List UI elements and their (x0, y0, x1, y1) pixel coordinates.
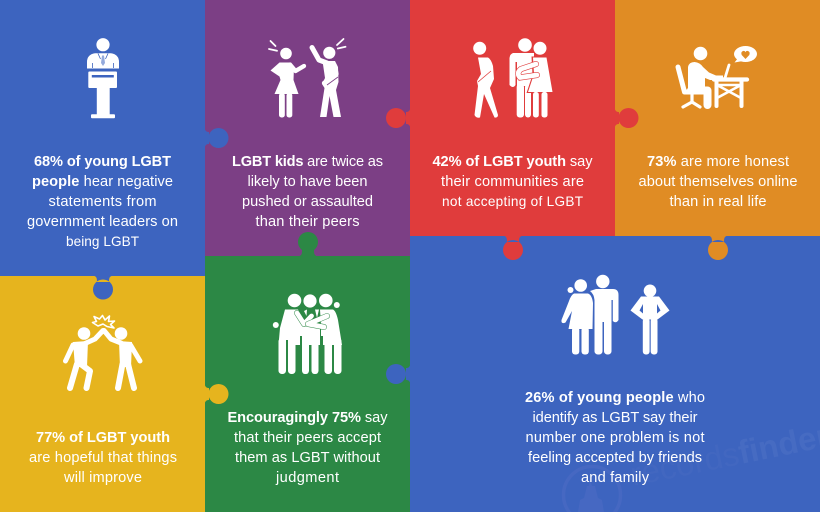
text: government leaders statistic: being LGBT (66, 234, 139, 249)
panel: peers accept (205, 256, 410, 512)
text: pushed or assaulted statistic (232, 154, 383, 230)
puzzle tab: red into orange (615, 108, 638, 128)
text: pushed or assaulted statistic: LGBT kids are twice as (232, 154, 383, 170)
icon: person rejected by couple (473, 38, 554, 118)
puzzle tab: blue into purple (205, 128, 228, 148)
icon: group of three friends hugging (273, 294, 342, 374)
text: friends and family statistic (525, 390, 705, 486)
watermark: recordsfinder logo (564, 416, 820, 512)
panel: pushed or assaulted (205, 0, 410, 256)
text: friends and family statistic: feeling accepted by friends (528, 450, 702, 466)
icon: family and isolated child (561, 275, 670, 354)
puzzle tab: red into purple (386, 108, 410, 128)
panel: hopeful (0, 276, 205, 512)
text: hopeful statistic (29, 430, 177, 486)
text: honest online statistic: than in real life (670, 194, 766, 210)
text: hopeful statistic: will improve (63, 470, 142, 486)
text: hopeful statistic: are hopeful that things (29, 450, 177, 466)
text: government leaders statistic: 68% of young LGBT (34, 154, 171, 170)
text: friends and family statistic: 26% of young people who (525, 390, 705, 406)
puzzle tab: red into blue (503, 236, 523, 260)
text: peers accept statistic (228, 410, 388, 486)
puzzle tab: orange into blue (708, 236, 728, 260)
text: honest online statistic (638, 154, 798, 210)
puzzle tab: green into purple (298, 232, 318, 256)
text: friends and family statistic: number one problem is not (526, 430, 704, 446)
text: government leaders statistic: government leaders on (27, 214, 178, 230)
text: pushed or assaulted statistic: likely to have been (248, 174, 368, 190)
icon: two people high-fiving (66, 316, 140, 388)
text: communities statistic: 42% of LGBT youth say (432, 154, 593, 170)
text: peers accept statistic: Encouragingly 75% say (228, 410, 388, 426)
puzzle tab: yellow into green (205, 384, 228, 404)
text: pushed or assaulted statistic: than their peers (256, 214, 360, 230)
text: peers accept statistic: judgment (275, 470, 339, 486)
text: communities statistic (432, 154, 593, 209)
text: peers accept statistic: them as LGBT without (235, 450, 380, 466)
puzzle tab: blue into green (386, 364, 410, 384)
text: hopeful statistic: 77% of LGBT youth (36, 430, 170, 446)
puzzle tab: blue into yellow (93, 276, 113, 300)
text: friends and family statistic: identify as LGBT say their (532, 410, 698, 426)
icon: speaker at podium (87, 38, 119, 118)
panel: honest online (615, 0, 820, 236)
panel: not accepted by friends and family (410, 236, 820, 512)
text: communities statistic: their communities are (441, 174, 584, 190)
text: peers accept statistic: that their peers accept (234, 430, 381, 446)
text: honest online statistic: about themselves online (638, 174, 798, 190)
icon: person at laptop with heart bubble (678, 46, 757, 107)
text: friends and family statistic: and family (581, 470, 650, 486)
icon: two people arguing (269, 39, 346, 118)
text: government leaders statistic: statements from (48, 194, 156, 210)
text: communities statistic: not accepting of LGBT (442, 194, 583, 209)
panel: government leaders (0, 0, 205, 276)
text: government leaders statistic (27, 154, 178, 249)
panel: communities not accepting (410, 0, 615, 236)
text: government leaders statistic: people hear negative (32, 174, 173, 190)
text: honest online statistic: 73% are more honest (647, 154, 789, 170)
text: pushed or assaulted statistic: pushed or assaulted (242, 194, 373, 210)
